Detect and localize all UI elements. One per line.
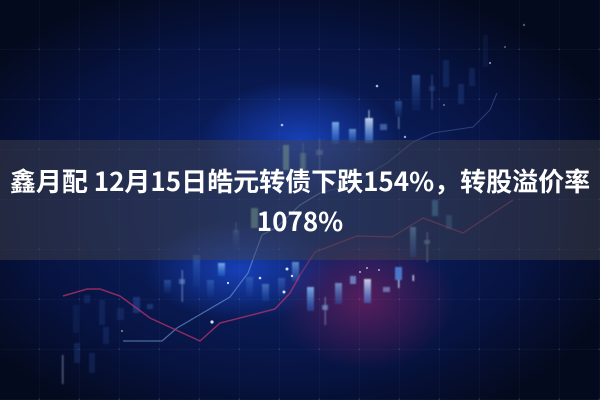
sparkle dots (121, 24, 525, 332)
line: blue price trend, upper part (320, 93, 497, 193)
candlesticks: lower series (62, 200, 452, 384)
title: 1078% (257, 202, 343, 239)
title (10, 162, 590, 239)
line: blue price trend, lower part (123, 193, 320, 341)
candlesticks: upper series (283, 35, 488, 170)
translucent title band (0, 140, 600, 260)
glow: blue upper centre (200, 80, 400, 200)
title: 鑫月配 12月15日皓元转债下跌154%，转股溢价率 (10, 162, 590, 199)
glow: blue lower centre (145, 220, 335, 320)
glow: magenta lower right (275, 230, 455, 370)
line: red price trend, upper part (300, 200, 513, 275)
line: red price trend, lower part (63, 275, 300, 341)
